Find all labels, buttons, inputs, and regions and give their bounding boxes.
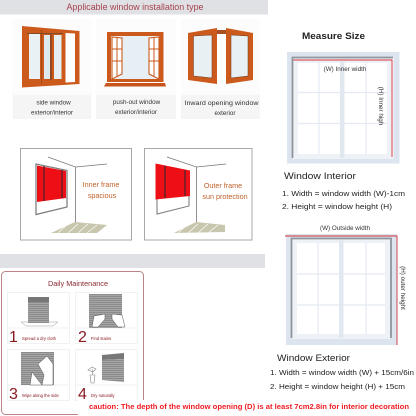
measure line: outside width (285, 236, 397, 345)
diagram: window interior (287, 52, 400, 164)
label: outside width: (W) Outside width (320, 225, 371, 232)
heading: window interior: Window Interior (284, 171, 356, 181)
panel: inward opening window (181, 19, 260, 119)
icon: sliding window (22, 26, 80, 88)
caution note: caution: The depth of the window opening (D) is at least 7cm2.8in for interior decoration (89, 402, 409, 411)
step 4 (76, 350, 138, 403)
grey divider band (0, 254, 265, 268)
label: inner frame spacious: spacious (88, 191, 117, 200)
formula: interior: 2. Height = window height (H) (282, 202, 392, 211)
caution note (78, 400, 416, 416)
caption: side window: side window (36, 100, 71, 106)
label: outer frame sun protection: sun protection (202, 192, 248, 201)
illustration: room corner with outer frame blind (156, 157, 226, 233)
caption: inward opening window: exterior (214, 110, 236, 117)
formula: exterior: 2. Height = window height (H) + 15cm (270, 382, 405, 391)
step 3: Wipe along the side (22, 393, 59, 398)
label: outer height: (H) outer height (399, 266, 406, 310)
caption: inward opening window: Inward opening window (184, 100, 259, 107)
formula: exterior: 1. Width = window width (W) + 15cm/6in (270, 368, 414, 377)
formula: interior: 1. Width = window width (W)-1cm (282, 189, 405, 198)
step 3 (8, 350, 70, 403)
formula: interior (282, 189, 405, 211)
icon: push-out window (104, 32, 166, 86)
formula: exterior (270, 368, 414, 391)
step 2: Find stains (91, 336, 111, 341)
step 4: 4 (78, 386, 87, 403)
step 1: 1 (9, 329, 18, 346)
panel: inner frame (20, 148, 132, 240)
step 1: Spread a dry cloth (22, 336, 57, 341)
panel: outer frame (144, 148, 252, 240)
step 2 (76, 292, 138, 346)
diagram: window exterior (285, 234, 397, 345)
step 1 (8, 292, 70, 346)
step 3: 3 (9, 386, 18, 403)
illustration: room corner with inner frame blind (36, 157, 107, 233)
header: installation type (0, 0, 268, 14)
heading: measure size: Measure Size (302, 31, 365, 41)
measure line: inner width (294, 60, 392, 157)
heading: window exterior: Window Exterior (277, 353, 350, 363)
label: inner high: (H) Inner high (377, 87, 384, 126)
panel: side window (12, 19, 92, 119)
panel: daily maintenance (2, 272, 144, 414)
label: inner frame spacious: Inner frame (83, 180, 119, 189)
caption: side window: exterior/interior (31, 110, 73, 116)
step 4: Dry naturally (91, 393, 115, 398)
label: inner width: (W) Inner width (324, 66, 367, 73)
caption: push-out window: push-out window (113, 99, 161, 106)
heading: daily maintenance: Daily Maintenance (48, 279, 108, 288)
header: installation type: Applicable window installation type (66, 2, 204, 12)
caption: push-out window: exterior/interior (115, 109, 157, 116)
panel: push-out window (96, 19, 176, 119)
icon: inward opening window (188, 28, 253, 84)
label: outer frame sun protection: Outer frame (204, 181, 242, 190)
step 2: 2 (78, 329, 87, 346)
